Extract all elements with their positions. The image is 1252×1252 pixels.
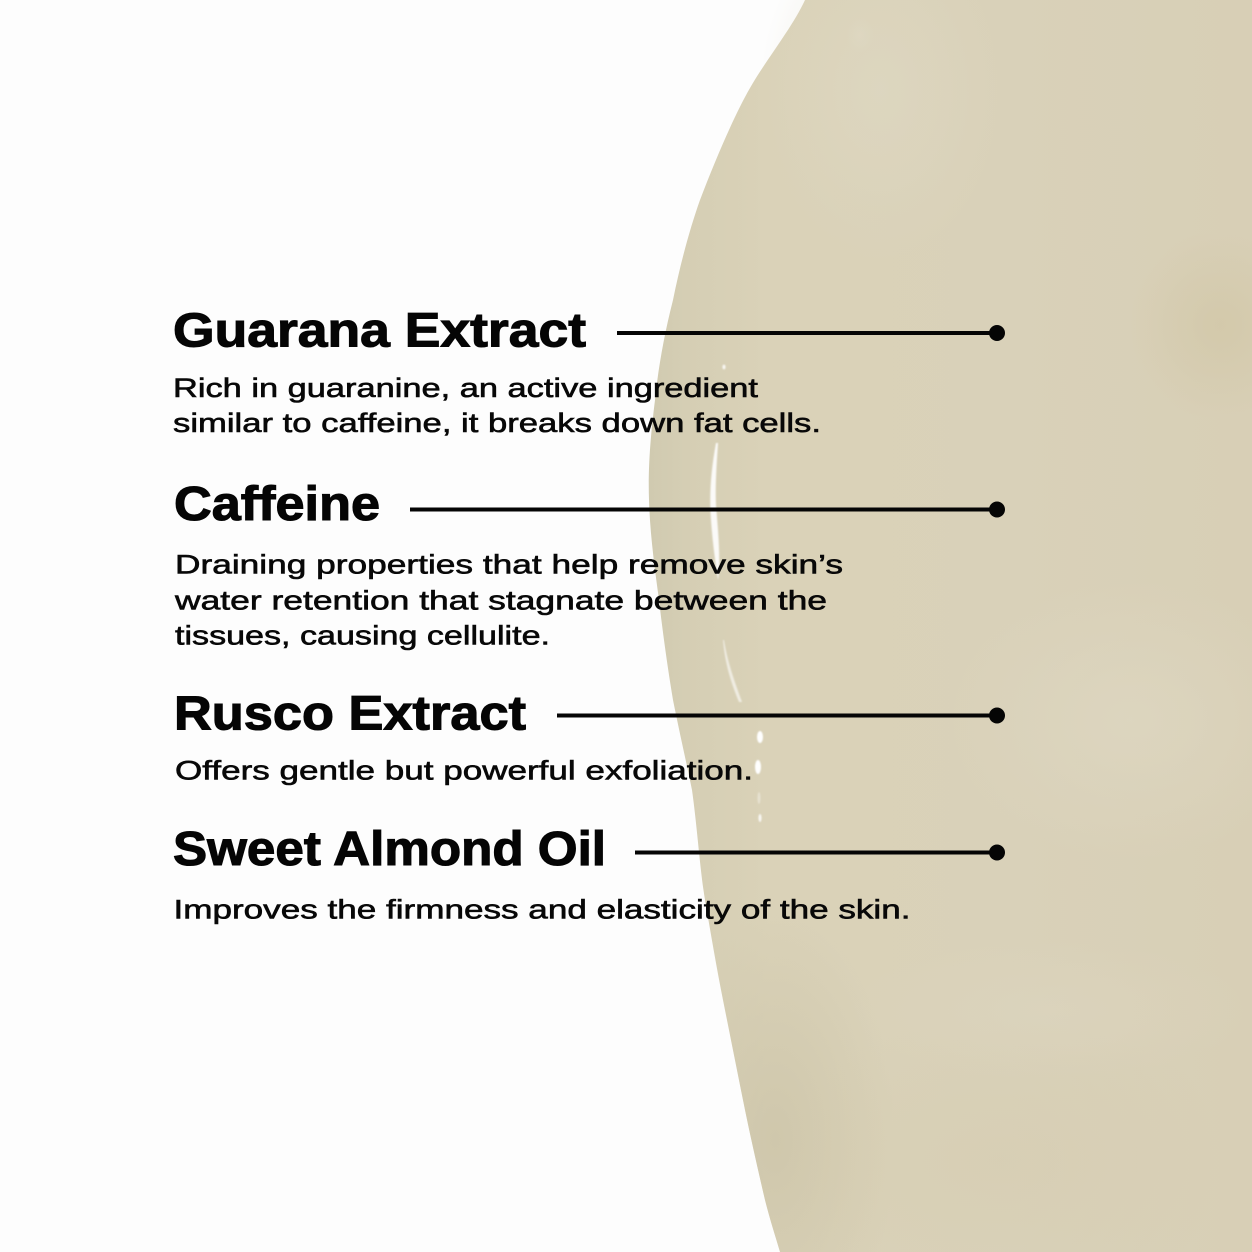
ingredient: Sweet Almond Oil xyxy=(173,823,1005,924)
description: Caffeine: water retention that stagnate between the xyxy=(174,586,827,616)
heading: Rusco Extract: Rusco Extract xyxy=(174,688,526,740)
description: Guarana Extract: Rich in guaranine, an active ingredient xyxy=(173,373,759,403)
cream highlights xyxy=(710,365,763,822)
cream swatch xyxy=(649,0,1252,1252)
description: Caffeine: Draining properties that help remove skin’s xyxy=(175,550,843,580)
heading: Caffeine: Caffeine xyxy=(174,478,380,531)
heading: Guarana Extract: Guarana Extract xyxy=(173,304,586,358)
leader line: Guarana Extract xyxy=(617,325,1005,341)
ingredient: Rusco Extract xyxy=(174,688,1005,786)
leader line: Sweet Almond Oil xyxy=(635,844,1005,860)
ingredient: Guarana Extract xyxy=(173,304,1005,438)
ingredient: Caffeine xyxy=(174,478,1005,650)
description: Sweet Almond Oil: Improves the firmness and elasticity of the skin. xyxy=(174,894,910,924)
heading: Sweet Almond Oil: Sweet Almond Oil xyxy=(173,823,606,876)
description: Caffeine: tissues, causing cellulite. xyxy=(175,620,550,650)
description: Guarana Extract xyxy=(173,373,821,438)
leader line: Rusco Extract xyxy=(557,708,1005,724)
description: Guarana Extract: similar to caffeine, it breaks down fat cells. xyxy=(173,408,821,438)
leader line: Caffeine xyxy=(410,502,1005,518)
description: Caffeine xyxy=(174,550,843,650)
description: Rusco Extract: Offers gentle but powerful exfoliation. xyxy=(175,756,753,786)
